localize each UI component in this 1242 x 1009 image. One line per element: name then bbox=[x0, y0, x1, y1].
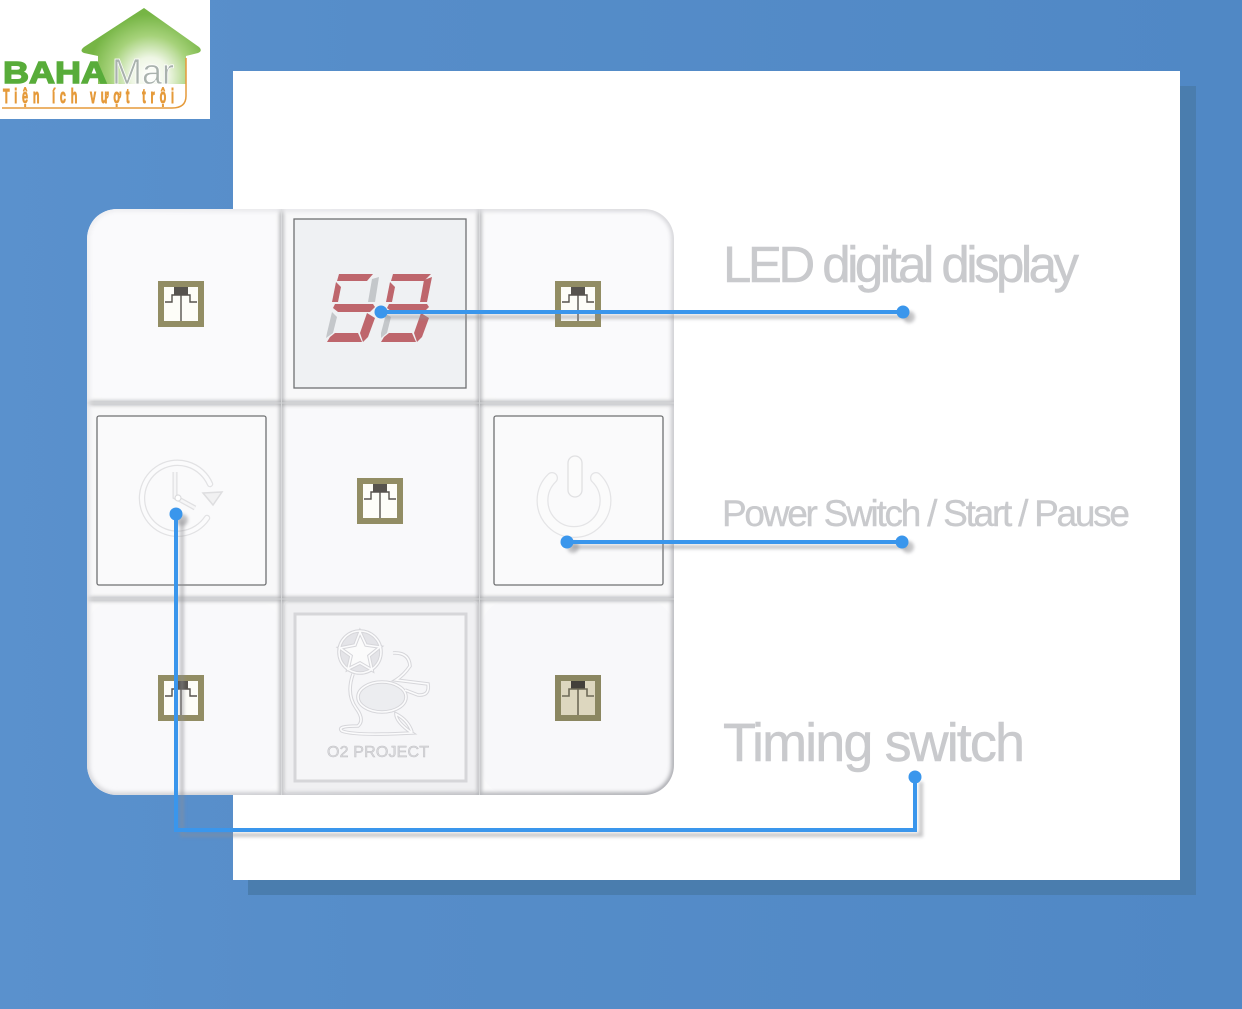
control panel keypad bbox=[87, 209, 674, 795]
power window bbox=[494, 416, 663, 585]
connector: timing switch bbox=[170, 508, 922, 830]
connector: power switch bbox=[560, 536, 908, 548]
icon: clock with arrow bbox=[142, 463, 222, 534]
keypad base bbox=[87, 209, 674, 795]
icon: O2 mascot with star ball bbox=[339, 631, 428, 734]
logo: BAHAMar bbox=[0, 0, 210, 119]
digits 58 seven-segment bbox=[326, 274, 432, 342]
O2 PROJECT label: O2 PROJECT bbox=[327, 744, 429, 761]
white card drop shadow bbox=[248, 86, 1196, 895]
tile: bottom right bbox=[482, 601, 673, 794]
icon: power symbol bbox=[542, 456, 606, 532]
tile: bottom left bbox=[88, 601, 280, 794]
timing window bbox=[97, 416, 266, 585]
chip icon bbox=[158, 675, 204, 721]
grooves and bevels between tiles bbox=[85, 205, 680, 800]
connector end-dot shadows bbox=[176, 311, 915, 553]
chip icon bbox=[555, 281, 601, 327]
logo icon: green house roof bbox=[82, 8, 201, 84]
logo wordmark: Mar bbox=[112, 51, 174, 92]
white card panel bbox=[233, 71, 1180, 880]
connector: LED display bbox=[374, 306, 910, 318]
tile: timing bbox=[88, 405, 280, 597]
tile: LED display bbox=[284, 210, 478, 401]
logo tagline: Tiện ích vượt trội bbox=[3, 86, 174, 108]
connector line shadows bbox=[182, 317, 921, 835]
logo wordmark bbox=[3, 51, 174, 92]
tile: power bbox=[482, 405, 673, 597]
chip icon bbox=[555, 675, 601, 721]
label: Timing switch: Timing switch bbox=[723, 713, 1025, 773]
chip icon bbox=[158, 281, 204, 327]
tile: top right bbox=[482, 210, 673, 401]
chip icon bbox=[357, 478, 403, 524]
logo wordmark: BAHA bbox=[3, 55, 107, 90]
logo orange underline bbox=[2, 58, 186, 108]
label: Power Switch / Start / Pause: Power Switch / Start / Pause bbox=[722, 493, 1130, 534]
tile: O2 project bbox=[284, 601, 478, 793]
tile: center bbox=[284, 405, 478, 597]
tile: top left bbox=[88, 210, 280, 401]
display window bbox=[294, 219, 466, 388]
label: LED digital display: LED digital display bbox=[723, 236, 1080, 293]
